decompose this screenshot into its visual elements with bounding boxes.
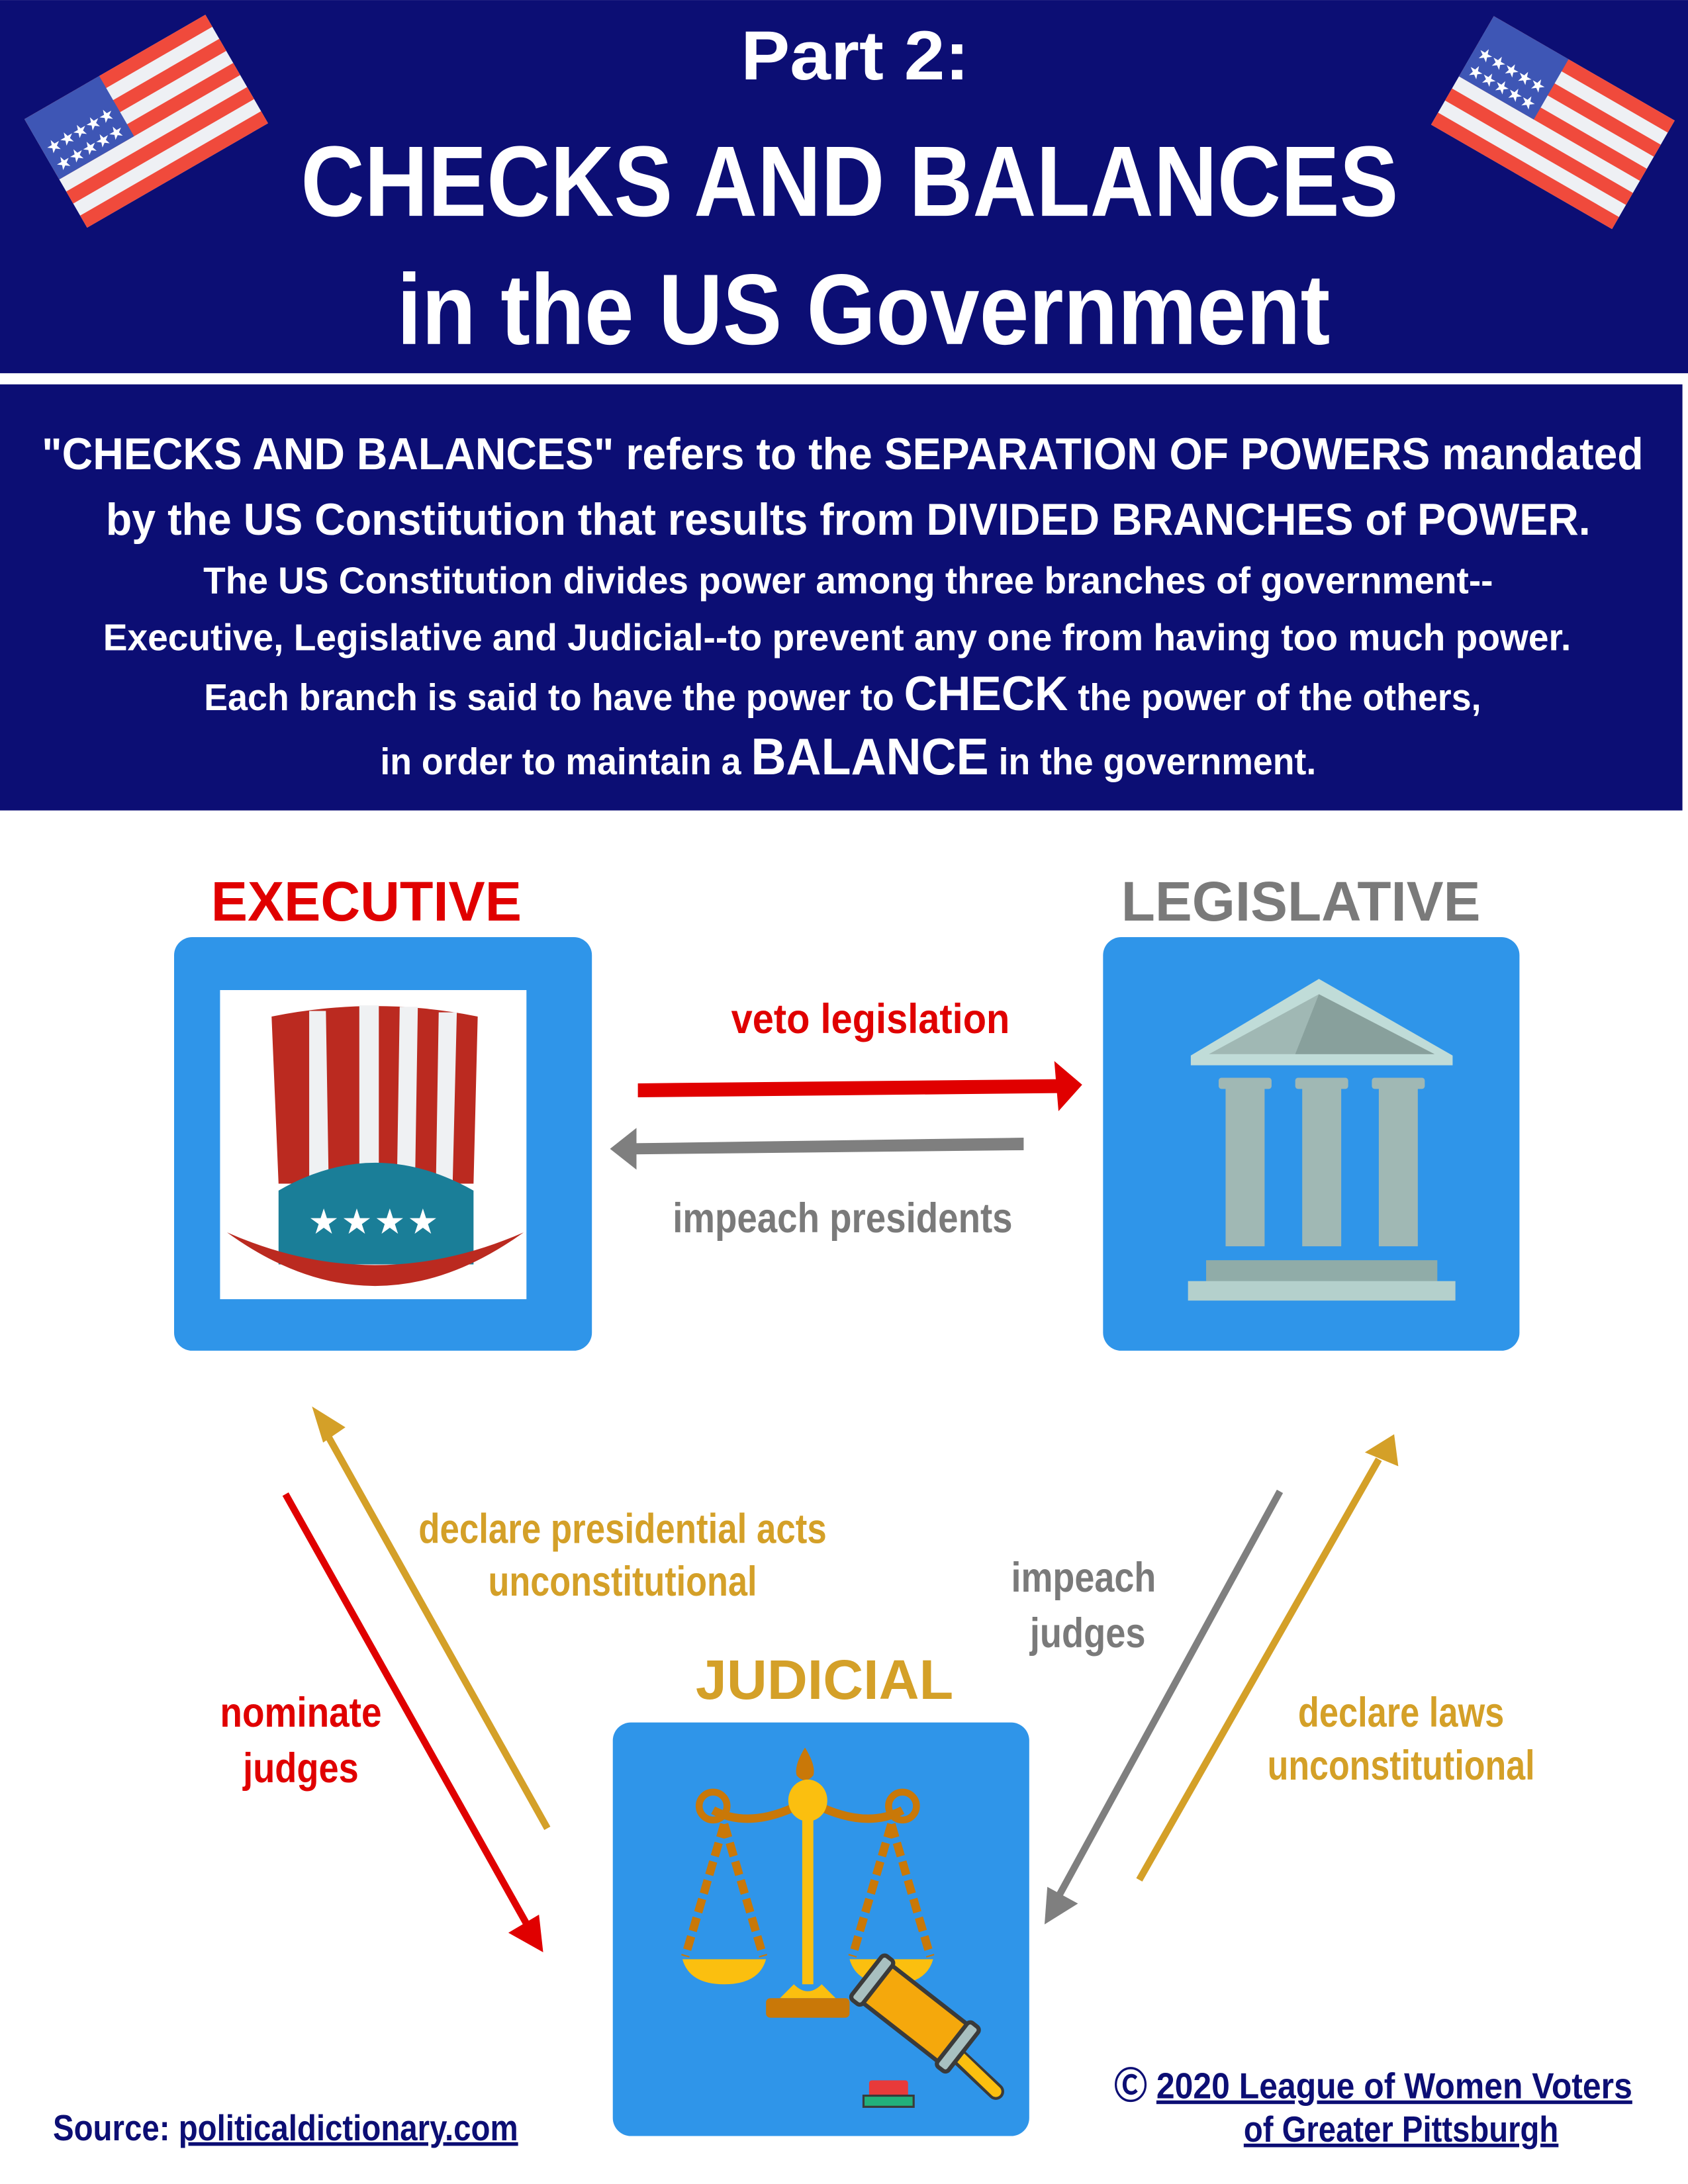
heading: executive: EXECUTIVE — [211, 870, 522, 933]
label: declare laws unconstitutional — [1268, 1690, 1535, 1789]
icon: uncle sam hat — [227, 1005, 524, 1286]
label: declare laws unconstitutional: declare laws — [1298, 1690, 1504, 1736]
panel: executive box with hat — [174, 937, 592, 1351]
icon: scales of justice — [682, 1748, 933, 2018]
label: veto legislation: veto legislation — [731, 996, 1009, 1042]
arrow: impeach presidents (legis to exec) — [610, 1128, 1023, 1169]
icon: left flag: ★★★★★ — [54, 121, 128, 173]
label: impeach presidents: impeach presidents — [673, 1195, 1013, 1242]
panel: intro text: Each branch is said to have the power to CHECK the power of the others, — [204, 666, 1481, 721]
label: impeach judges: impeach — [1011, 1555, 1156, 1601]
panel: intro text: "CHECKS AND BALANCES" refers to the SEPARATION OF POWERS mandated — [42, 430, 1644, 479]
label: declare presidential acts unconstitutional: unconstitutional — [488, 1559, 757, 1605]
icon: left flag — [24, 15, 268, 228]
icon: gavel — [849, 1954, 996, 2107]
heading: judicial: JUDICIAL — [696, 1649, 953, 1711]
icon: right flag: ★★★★★ — [1466, 61, 1540, 114]
icon: capitol building — [1188, 979, 1456, 1300]
label: declare presidential acts unconstitutional — [418, 1506, 827, 1605]
arrow: veto (exec to legis) — [638, 1061, 1082, 1111]
panel: intro text: in order to maintain a BALANCE in the government. — [380, 729, 1316, 786]
copyright credit — [1114, 2066, 1632, 2150]
arrow: declare presidential acts (judicial to exec) — [312, 1406, 547, 1829]
icon: right flag: ★★★★★ — [1476, 44, 1549, 97]
source credit: Source: politicaldictionary.com — [53, 2107, 518, 2148]
label: nominate judges: nominate — [220, 1690, 381, 1736]
label: declare presidential acts unconstitutional: declare presidential acts — [418, 1506, 827, 1552]
label: nominate judges — [220, 1690, 381, 1792]
panel: intro text: Executive, Legislative and Judicial--to prevent any one from having too much power. — [103, 617, 1571, 659]
arrow: declare laws (judicial to legis) — [1139, 1434, 1398, 1880]
title: part 2: Part 2: — [741, 17, 969, 95]
icon: uncle sam hat: ★★★★ — [310, 1205, 442, 1239]
copyright credit: of Greater Pittsburgh — [1244, 2109, 1558, 2150]
panel: legislative box with building — [1103, 937, 1519, 1351]
copyright credit: Ⓒ 2020 League of Women Voters — [1114, 2066, 1632, 2107]
label: impeach judges — [1011, 1555, 1156, 1657]
icon: left flag: ★★★★★ — [44, 104, 118, 157]
panel: judicial box with scales — [613, 1723, 1029, 2136]
label: nominate judges: judges — [242, 1745, 359, 1792]
panel: intro text: by the US Constitution that results from DIVIDED BRANCHES of POWER. — [106, 495, 1591, 545]
label: declare laws unconstitutional: unconstitutional — [1268, 1743, 1535, 1789]
heading: legislative: LEGISLATIVE — [1121, 870, 1481, 933]
title: checks and balances: CHECKS AND BALANCES — [301, 126, 1398, 238]
icon: right flag — [1431, 16, 1675, 229]
panel: intro text — [0, 385, 1683, 811]
header band — [0, 0, 1688, 373]
label: impeach judges: judges — [1029, 1610, 1146, 1657]
arrow: impeach judges (legis to judicial) — [1045, 1491, 1280, 1925]
panel: intro text: The US Constitution divides power among three branches of government-- — [203, 560, 1493, 602]
arrow: nominate judges (exec to judicial) — [285, 1494, 543, 1952]
title: in the US Government: in the US Government — [397, 254, 1330, 366]
